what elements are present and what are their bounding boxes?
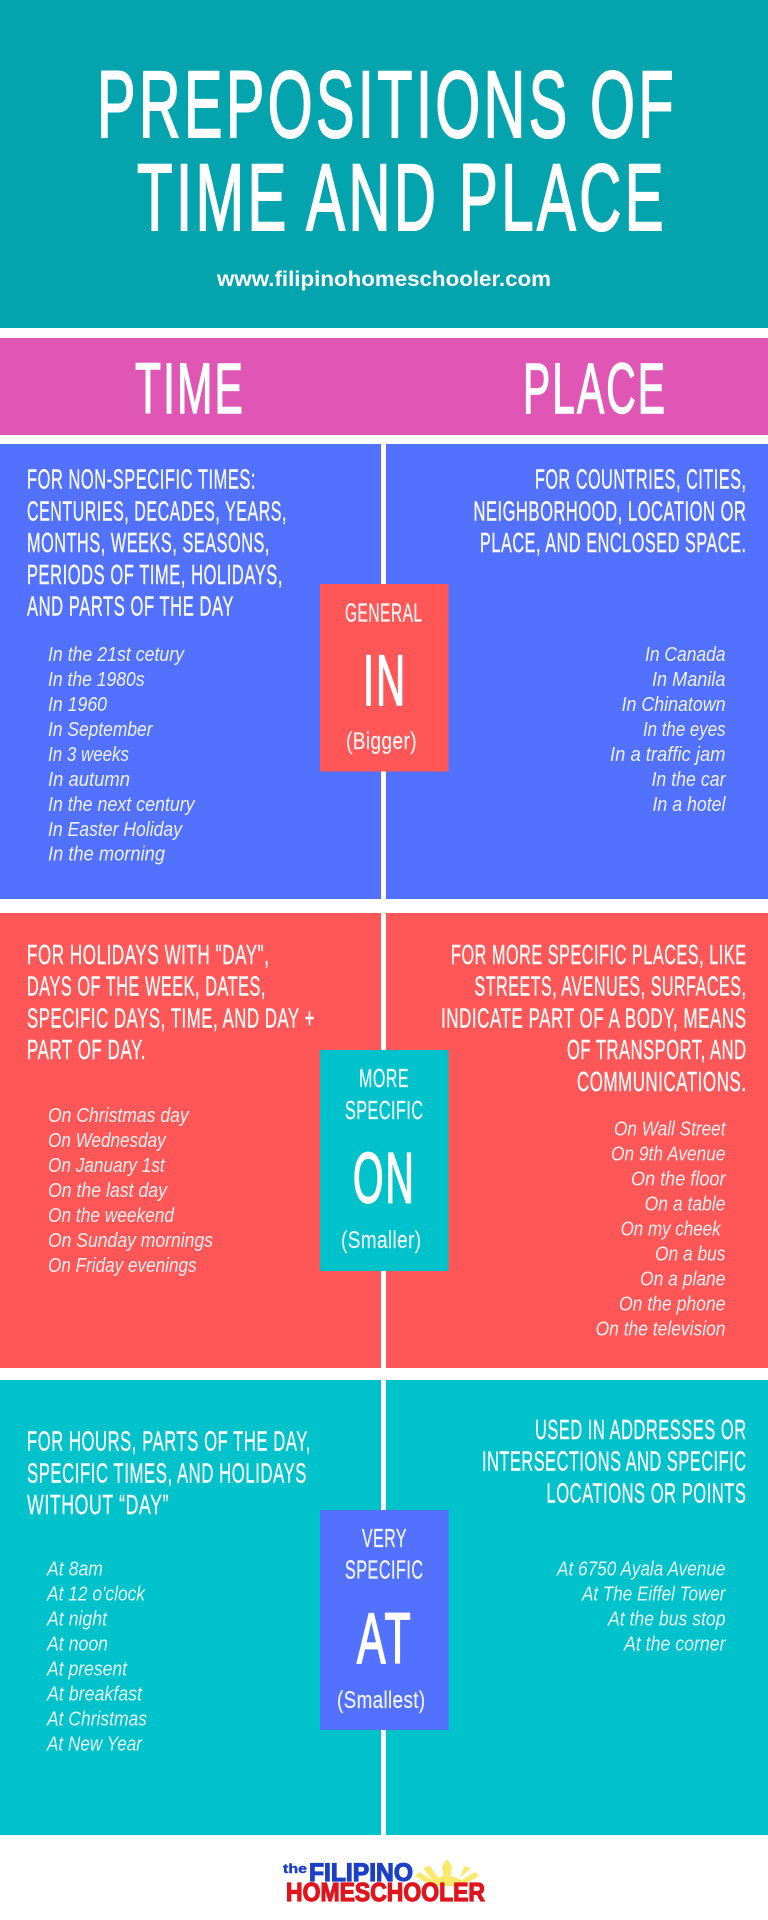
list: at place examples: At The Eiffel Tower <box>581 1584 727 1606</box>
text: at time rule: SPECIFIC TIMES, AND HOLIDAYS <box>27 1457 307 1488</box>
center box: at <box>320 1510 448 1730</box>
list: on time examples: On Christmas day <box>48 1105 190 1127</box>
logo: the filipino homeschooler: FILIPINO <box>309 1859 413 1887</box>
list: on place examples: On a table <box>645 1194 726 1216</box>
center box: on: MORE <box>359 1063 409 1093</box>
center box: at: AT <box>357 1600 413 1679</box>
text: on time rule: PART OF DAY. <box>27 1034 146 1065</box>
text: at time rule: WITHOUT “DAY” <box>27 1489 169 1520</box>
list: on place examples: On a bus <box>655 1244 726 1266</box>
logo: the filipino homeschooler <box>283 1859 485 1907</box>
list: on time examples: On Wednesday <box>48 1130 167 1152</box>
list: in time examples: In the next century <box>48 794 195 816</box>
text: in place rule <box>474 464 747 558</box>
list: at time examples: At 12 o'clock <box>46 1584 146 1606</box>
list: in time examples: In the morning <box>48 844 165 866</box>
text: in time rule: FOR NON-SPECIFIC TIMES: <box>27 464 256 495</box>
list: at place examples: At 6750 Ayala Avenue <box>556 1559 726 1581</box>
center box: in: (Bigger) <box>346 728 417 755</box>
list: at time examples: At noon <box>46 1634 108 1656</box>
row: at <box>0 1380 768 1835</box>
list: in place examples <box>610 644 727 816</box>
center box: in: GENERAL <box>345 598 422 628</box>
panel: on place <box>386 913 768 1368</box>
row: in <box>0 444 768 899</box>
row: on <box>0 913 768 1368</box>
center box: on <box>320 1050 448 1271</box>
panel: in time <box>0 444 381 899</box>
list: on time examples: On Friday evenings <box>48 1255 197 1277</box>
list: on place examples: On a plane <box>640 1269 726 1291</box>
list: in time examples: In September <box>48 719 154 741</box>
panel: at time <box>0 1380 381 1835</box>
center box: at: SPECIFIC <box>345 1555 424 1585</box>
list: in time examples: In Easter Holiday <box>48 819 183 841</box>
list: in place examples: In Manila <box>652 669 726 691</box>
list: at time examples <box>46 1559 147 1756</box>
title <box>97 52 677 251</box>
text: in time rule: CENTURIES, DECADES, YEARS, <box>27 495 287 526</box>
center box: in <box>320 584 448 772</box>
center box: at: (Smallest) <box>337 1687 426 1714</box>
list: in place examples: In the car <box>652 769 727 791</box>
list: on place examples: On the television <box>596 1319 726 1341</box>
list: at time examples: At New Year <box>46 1734 143 1756</box>
list: in time examples: In the 1980s <box>48 669 145 691</box>
list: at time examples: At breakfast <box>46 1684 143 1706</box>
text: on time rule: SPECIFIC DAYS, TIME, AND DAY + <box>27 1002 315 1033</box>
text: in time rule: AND PARTS OF THE DAY <box>27 590 234 622</box>
logo: the filipino homeschooler: HOMESCHOOLER <box>286 1877 485 1907</box>
center box: on: SPECIFIC <box>345 1095 424 1125</box>
heading: place: PLACE <box>523 350 667 429</box>
list: in place examples: In Canada <box>645 644 726 666</box>
list: on time examples: On Sunday mornings <box>48 1230 213 1252</box>
list: on time examples <box>48 1105 213 1277</box>
list: on time examples: On January 1st <box>48 1155 166 1177</box>
list: in place examples: In a traffic jam <box>610 744 726 766</box>
list: on place examples: On my cheek <box>621 1219 721 1241</box>
list: in place examples: In a hotel <box>652 794 726 816</box>
list: on place examples: On 9th Avenue <box>611 1144 726 1166</box>
list: in time examples: In 1960 <box>48 694 107 716</box>
text: in time rule: MONTHS, WEEKS, SEASONS, <box>27 527 270 558</box>
list: at place examples: At the corner <box>623 1634 727 1656</box>
list: at place examples: At the bus stop <box>607 1609 726 1631</box>
text: in time rule <box>27 464 287 622</box>
text: on time rule: DAYS OF THE WEEK, DATES, <box>27 971 266 1002</box>
list: on place examples: On the floor <box>631 1169 727 1191</box>
list: on place examples <box>596 1119 727 1341</box>
list: in time examples <box>48 644 195 866</box>
text: at time rule: FOR HOURS, PARTS OF THE DAY, <box>27 1426 311 1457</box>
text: at time rule <box>27 1426 311 1520</box>
header panel <box>0 0 768 328</box>
website url: www.filipinohomeschooler.com <box>216 268 551 291</box>
text: in time rule: PERIODS OF TIME, HOLIDAYS, <box>27 559 283 590</box>
center box: at: VERY <box>362 1523 407 1553</box>
panel: in place <box>386 444 768 899</box>
panel: at place <box>386 1380 768 1835</box>
list: in place examples: In the eyes <box>643 719 726 741</box>
heading: time: TIME <box>135 350 245 429</box>
text: on time rule: FOR HOLIDAYS WITH "DAY", <box>27 939 270 970</box>
text: on time rule <box>27 939 315 1065</box>
center box: in: IN <box>363 642 407 721</box>
list: in time examples: In the 21st cetury <box>48 644 185 666</box>
column header band <box>0 338 768 435</box>
list: in place examples: In Chinatown <box>622 694 726 716</box>
list: at place examples <box>556 1559 727 1656</box>
icon: yellow sun <box>415 1859 479 1886</box>
list: in time examples: In 3 weeks <box>48 744 129 766</box>
text: on place rule <box>441 939 747 1097</box>
logo: the filipino homeschooler: the <box>283 1861 307 1876</box>
center box: on: (Smaller) <box>341 1227 422 1254</box>
list: on time examples: On the last day <box>48 1180 168 1202</box>
list: on place examples: On the phone <box>619 1294 726 1316</box>
list: at time examples: At present <box>46 1659 128 1681</box>
list: at time examples: At 8am <box>46 1559 103 1581</box>
text: at place rule <box>482 1414 747 1508</box>
center box: on: ON <box>353 1140 416 1219</box>
list: in time examples: In autumn <box>48 769 130 791</box>
list: on time examples: On the weekend <box>48 1205 175 1227</box>
list: on place examples: On Wall Street <box>614 1119 727 1141</box>
panel: on time <box>0 913 381 1368</box>
list: at time examples: At Christmas <box>46 1709 147 1731</box>
list: at time examples: At night <box>46 1609 108 1631</box>
